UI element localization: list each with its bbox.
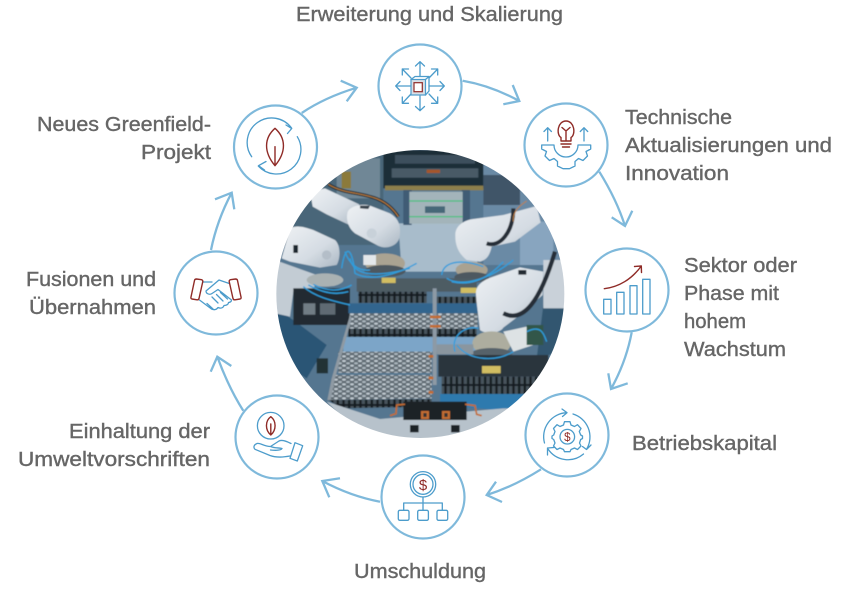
label: Betriebskapital: [632, 433, 777, 455]
label: Innovation: [625, 163, 729, 185]
node: Erweiterung und Skalierung: [296, 4, 563, 128]
label: Aktualisierungen und: [625, 135, 832, 157]
icon: leaf with cycle arrows: [247, 118, 301, 174]
label: Neues Greenfield-: [37, 114, 211, 136]
icon: hand holding leaf: [254, 412, 303, 461]
label: Wachstum: [684, 339, 786, 361]
label: Übernahmen: [29, 297, 156, 319]
icon: gear with dollar and cycle arrows: [544, 409, 591, 460]
label: Phase mit: [684, 283, 779, 305]
label: [684, 255, 797, 361]
label: [26, 269, 156, 319]
icon: dollar coin with hierarchy: $: [419, 477, 428, 494]
node: Neues Greenfield-Projekt: [37, 106, 317, 188]
node: Betriebskapital: [526, 394, 777, 476]
label: [18, 421, 210, 471]
node: Umschuldung: [354, 456, 486, 583]
label: Umschuldung: [354, 561, 486, 583]
icon: rising bar chart: [604, 266, 650, 314]
label: Fusionen und: [26, 269, 156, 291]
label: Umweltvorschriften: [18, 449, 210, 471]
icon: light bulb and gear: [542, 121, 591, 169]
node: Technische Aktualisierungen und Innovation: [524, 104, 832, 186]
node: Einhaltung der Umweltvorschriften: [18, 396, 318, 478]
label: Projekt: [141, 142, 211, 164]
label: Einhaltung der: [69, 421, 210, 443]
icon: cube with expanding arrows: [396, 62, 444, 111]
label: [625, 107, 832, 185]
photo: robotic battery assembly line: [270, 145, 570, 445]
icon: gear with dollar and cycle arrows: $: [564, 432, 571, 444]
label: Sektor oder: [684, 255, 797, 277]
label: [37, 114, 211, 164]
icon: handshake: [191, 279, 241, 310]
label: Technische: [625, 107, 732, 129]
label: Erweiterung und Skalierung: [296, 4, 563, 26]
label: hohem: [684, 311, 746, 333]
connector arrows: [211, 81, 632, 502]
node: Fusionen und Übernahmen: [26, 252, 258, 334]
node: Sektor oder Phase mit hohem Wachstum: [586, 248, 797, 361]
